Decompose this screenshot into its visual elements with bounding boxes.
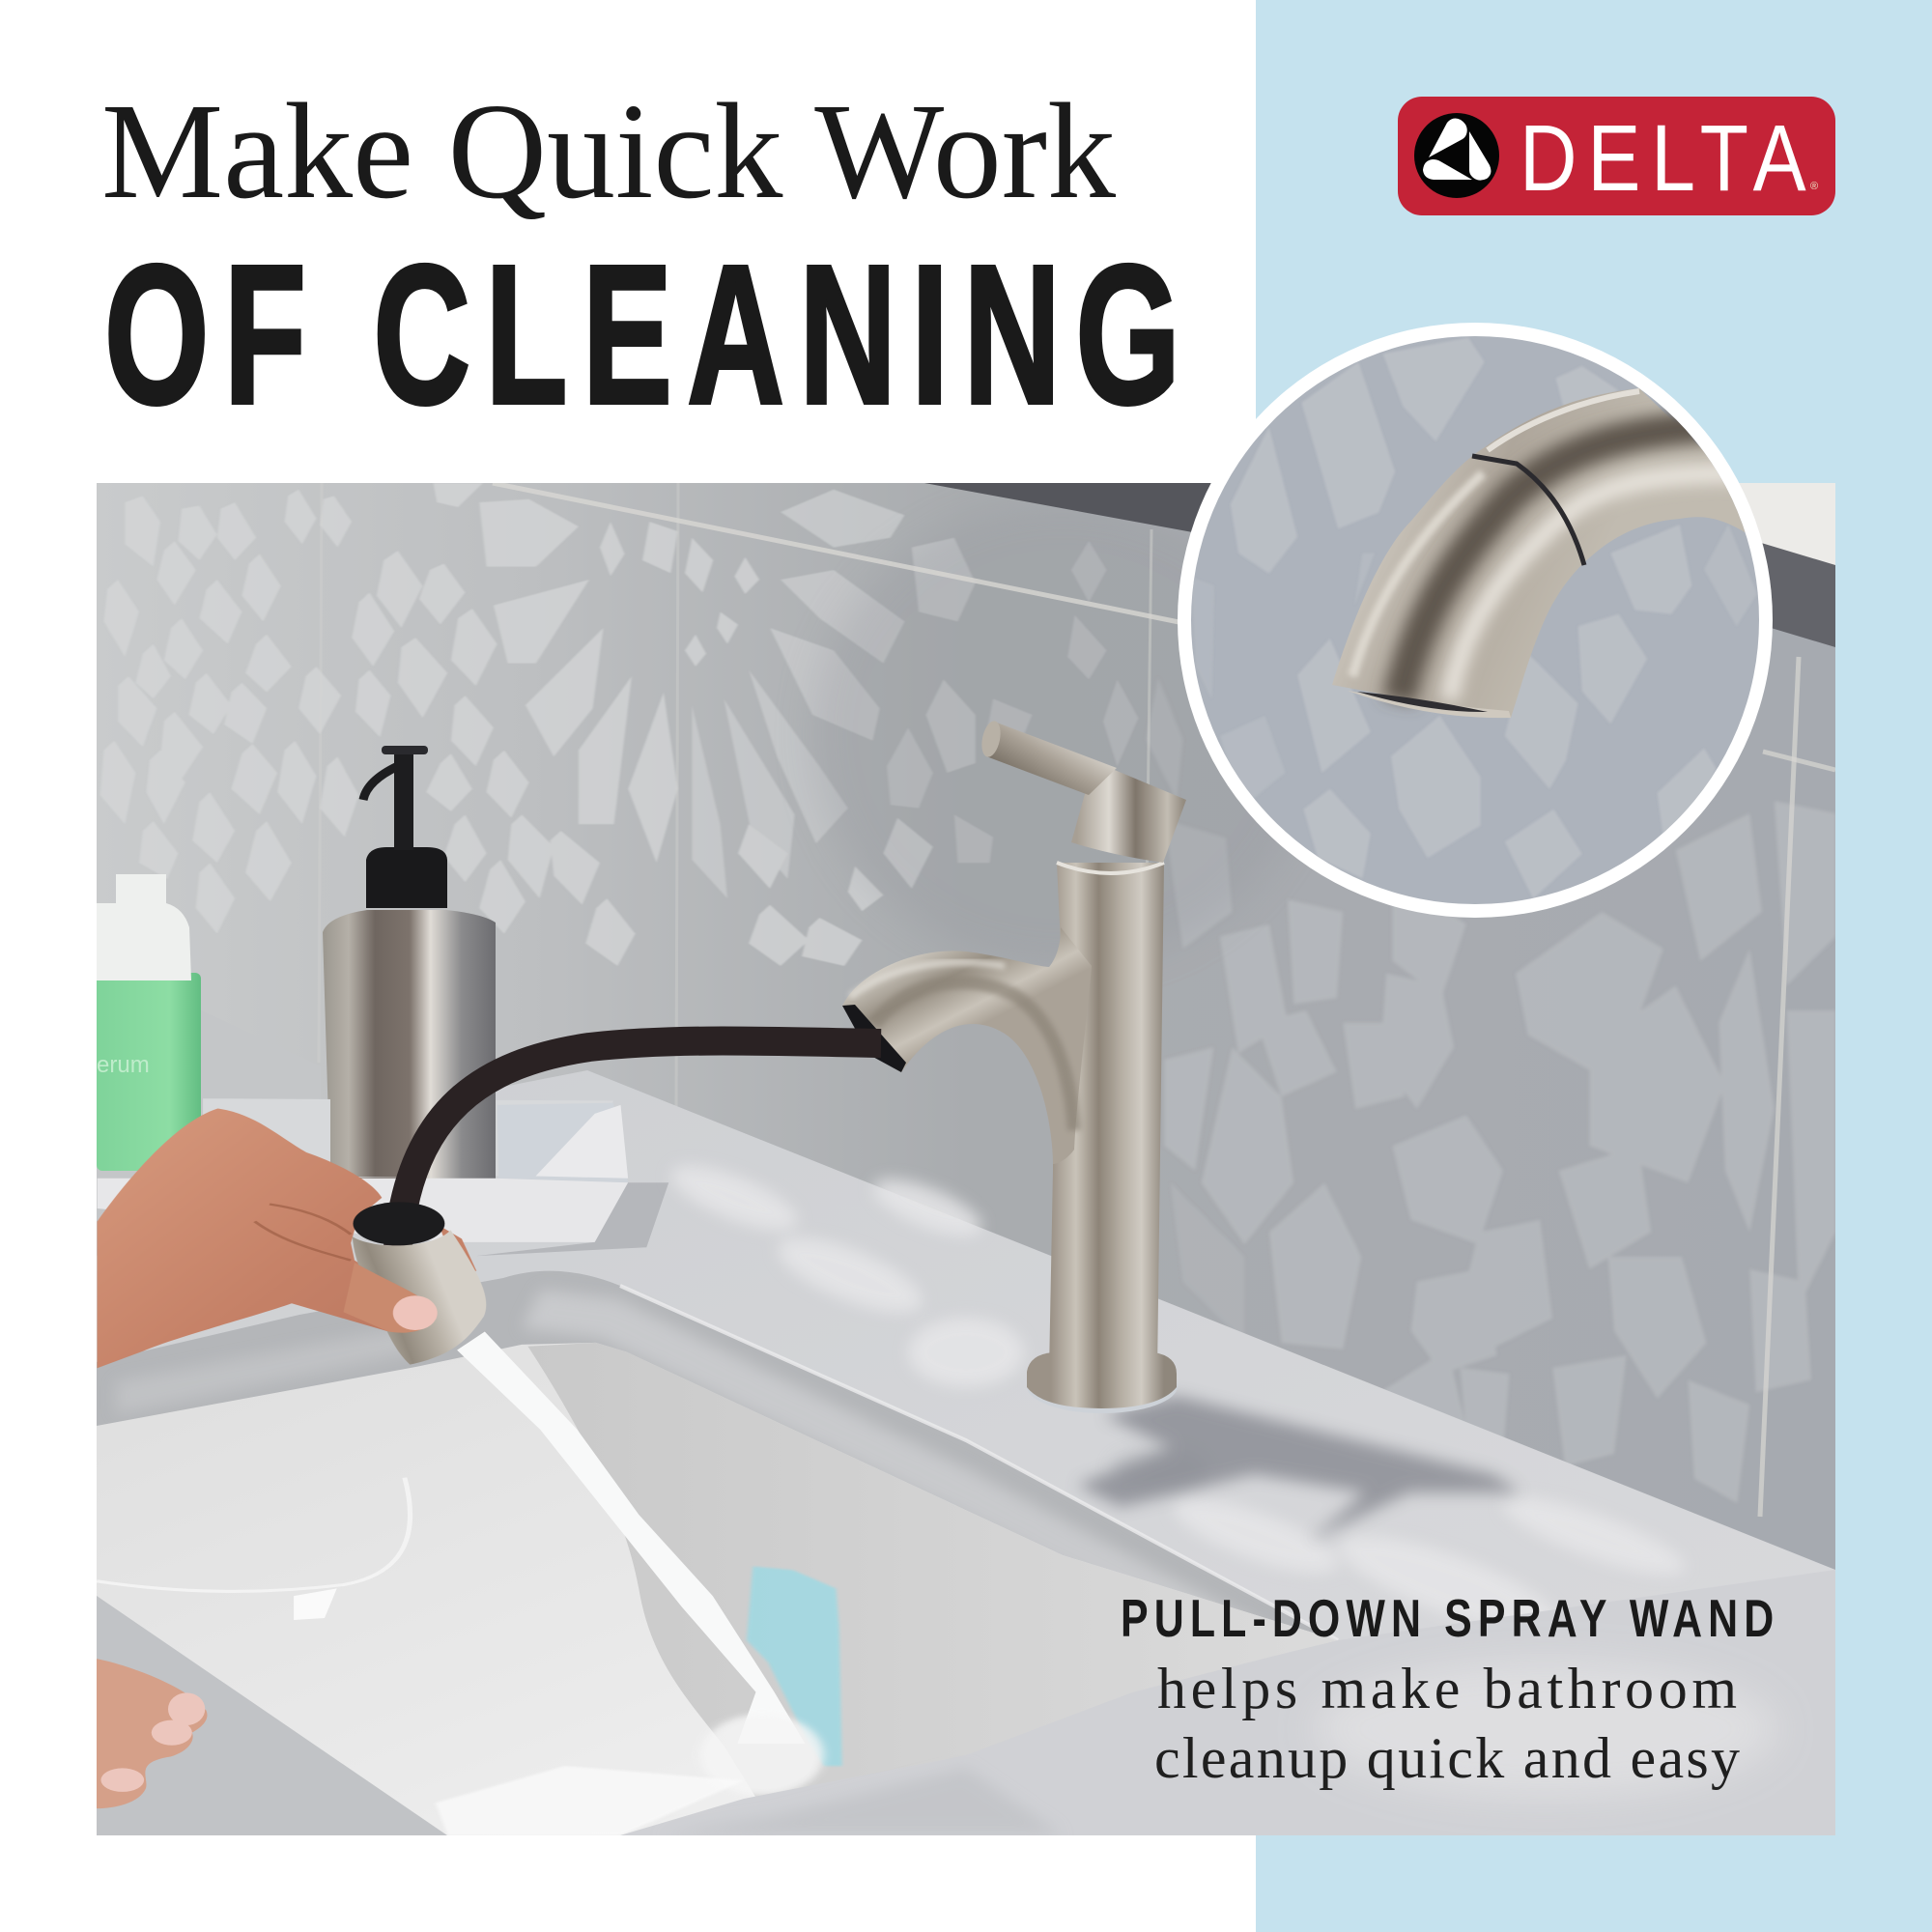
dispenser nozzle (382, 746, 428, 754)
close-up spout dark band (1399, 425, 1729, 700)
front counter shade (657, 1768, 1063, 1835)
sink rim (97, 1271, 1329, 1638)
basin floor foam (436, 1766, 744, 1835)
countertop shadow of faucet (1077, 1396, 1520, 1541)
icon: Delta triangle mark (1414, 113, 1499, 198)
close-up spout rim light (1352, 473, 1483, 676)
faucet handle (986, 723, 1117, 795)
title line one: Make Quick Work (101, 74, 1116, 227)
basin back wall (527, 1343, 1337, 1797)
callout line one: helps make bathroom (1157, 1657, 1737, 1720)
finger nails (168, 1692, 205, 1725)
tiled wall (97, 483, 1835, 1642)
logo wordmark: DELTA (1520, 107, 1806, 212)
soap dispenser (323, 746, 496, 1183)
basin highlight lines (97, 1478, 411, 1591)
close-up spout silhouette (1332, 388, 1797, 718)
close-up spout upper light (1488, 391, 1639, 450)
spout highlight (850, 962, 1005, 997)
pull-out hose (398, 1041, 881, 1246)
shelf: right upper corner (1739, 483, 1835, 647)
spout opening (1332, 685, 1511, 718)
close-up spout highlight (1449, 473, 1739, 700)
callout heading: PULL-DOWN SPRAY WAND (1121, 1589, 1774, 1648)
blue residue (747, 1566, 842, 1766)
dispenser pump (394, 752, 413, 850)
dispenser cap (366, 847, 447, 908)
faucet stem (1049, 863, 1164, 1372)
wall shading (815, 539, 1229, 923)
handle tip (979, 720, 1004, 758)
faucet collar line (1057, 863, 1164, 873)
grout lines (493, 483, 1835, 1517)
title (101, 74, 1180, 445)
callout text (1121, 1589, 1774, 1790)
sink rim top edge (620, 1286, 1338, 1640)
basin drain-side sparkle (294, 1588, 337, 1620)
redraw bottle base over tray (330, 1092, 496, 1177)
countertop marble mottling (672, 1165, 1677, 1621)
panel: circular spout close-up (1178, 323, 1797, 918)
lower hand fingers (97, 1659, 207, 1808)
close-up wall (1179, 328, 1777, 918)
thumb over wand (344, 1263, 438, 1333)
sink rim highlights (120, 1290, 1224, 1605)
water stream (457, 1331, 805, 1744)
countertop (146, 1070, 1835, 1640)
logo: Delta badge (1398, 97, 1835, 215)
faucet (842, 720, 1186, 1413)
spray wand head (353, 1230, 486, 1365)
spout dark band (874, 982, 1074, 1130)
counter front left (97, 1596, 447, 1835)
finger behind wand (440, 1226, 476, 1271)
finger creases (255, 1205, 351, 1261)
soap tray (98, 1098, 668, 1256)
bottle cap (97, 874, 191, 980)
water splash (700, 1715, 824, 1796)
panel: bathroom photo scene (97, 483, 1835, 1847)
panel: light blue backdrop (1256, 0, 1932, 1932)
registered mark: ® (1810, 181, 1818, 192)
green lotion bottle (97, 874, 201, 1171)
shelf: dark upper band (924, 483, 1217, 533)
faucet head (1071, 768, 1186, 863)
dispenser spout (363, 766, 398, 800)
thumb nail (393, 1295, 438, 1330)
spout arc (842, 927, 1092, 1164)
left hand holding wand (98, 1108, 486, 1368)
hose collar (353, 1202, 444, 1245)
spout ring seam (1472, 456, 1584, 565)
counter front right (620, 1570, 1835, 1835)
bottle label: erum (97, 1052, 150, 1078)
callout line two: cleanup quick and easy (1154, 1726, 1740, 1790)
marble highlights near text (1314, 1662, 1777, 1797)
sink basin (97, 1331, 1409, 1847)
side wall ledge (97, 1008, 321, 1256)
wall pattern: left and centre mosaic (100, 483, 1139, 966)
spout mouth (842, 1005, 906, 1072)
faucet base (1027, 1359, 1178, 1413)
close-up wall pattern (1192, 337, 1757, 898)
wall pattern: right large mosaic (1091, 678, 1835, 1503)
title line two: OF CLEANING (104, 224, 1180, 445)
